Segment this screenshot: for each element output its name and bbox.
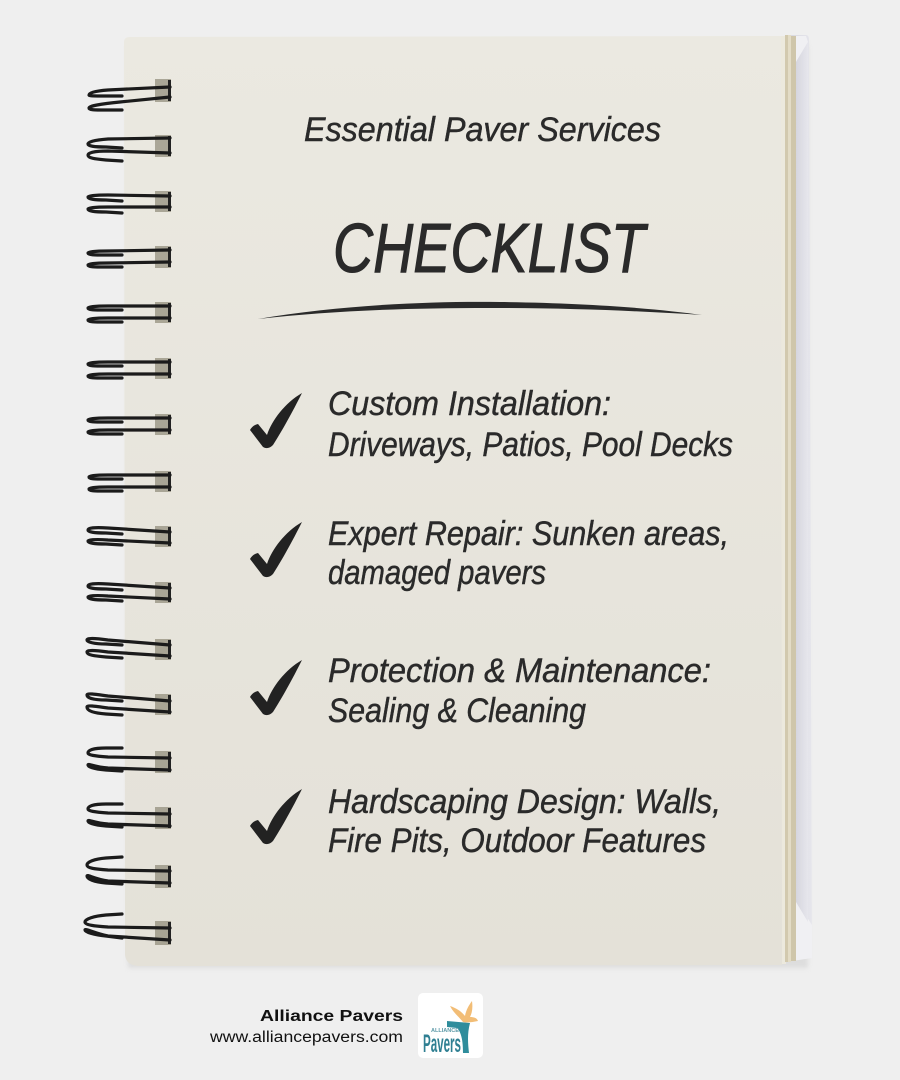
company name: Alliance Pavers: [260, 1008, 403, 1025]
icon: check mark: [250, 789, 302, 844]
checklist item 3: [250, 652, 711, 730]
notebook: [124, 35, 812, 968]
logo small text: ALLIANCE: [431, 1028, 460, 1034]
item text: Hardscaping Design: Walls,: [328, 783, 721, 821]
title underline: [258, 302, 702, 319]
page: [124, 36, 782, 966]
logo palm trunk: [447, 1021, 470, 1053]
back cover: [785, 35, 812, 961]
item text: Fire Pits, Outdoor Features: [328, 822, 706, 860]
logo: [418, 993, 483, 1058]
item text: Sealing & Cleaning: [328, 692, 586, 730]
checklist item 4: [250, 783, 721, 860]
item text: damaged pavers: [328, 554, 546, 592]
page edges: [780, 35, 796, 964]
item text: Expert Repair: Sunken areas,: [328, 515, 729, 553]
icon: check mark: [250, 393, 302, 448]
icon: check mark: [250, 660, 302, 715]
subtitle: Essential Paver Services: [304, 111, 661, 149]
title: CHECKLIST: CHECKLIST: [333, 209, 648, 287]
item text: Custom Installation:: [328, 385, 611, 423]
checklist item 1: [250, 385, 733, 464]
checklist item 2: [250, 515, 729, 592]
spiral binding: [85, 79, 171, 945]
company website: www.alliancepavers.com: [209, 1029, 403, 1046]
logo: Pavers: [423, 1030, 461, 1058]
item text: [328, 652, 711, 730]
item text: [328, 515, 729, 592]
item text: Protection & Maintenance:: [328, 652, 711, 690]
icon: check mark: [250, 522, 302, 577]
logo palm leaves: [450, 1001, 478, 1022]
item text: [328, 385, 733, 464]
item text: Driveways, Patios, Pool Decks: [328, 426, 733, 464]
item text: [328, 783, 721, 860]
